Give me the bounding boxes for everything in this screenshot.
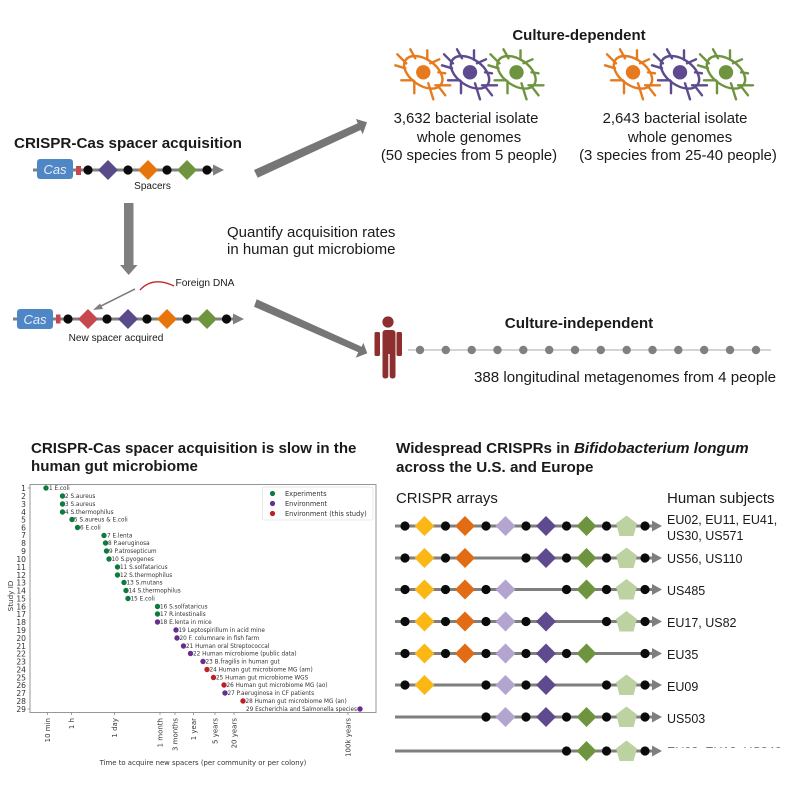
point labels: 7 E.lenta — [107, 534, 132, 540]
arrow: to culture-independent — [254, 299, 367, 358]
x axis labels: 1 day — [111, 718, 119, 738]
label: Spacers: Spacers — [134, 181, 171, 192]
array row 6 — [395, 674, 662, 695]
y axis labels: 8 — [21, 539, 26, 548]
array row 3 — [395, 579, 662, 600]
y axis labels: 4 — [21, 508, 26, 517]
foreign DNA strand and label: Foreign DNA — [176, 278, 235, 289]
point labels: 15 E.coli — [130, 596, 155, 602]
heading: spacer acquisition is slow: CRISPR-Cas spacer acquisition is slow in the — [31, 440, 356, 457]
x axis labels: 20 years — [230, 718, 238, 748]
panel: culture-independent — [374, 315, 776, 386]
x axis labels: 100k years — [344, 718, 352, 757]
y axis labels: 26 — [16, 681, 26, 690]
arrow: to culture-dependent — [254, 119, 367, 178]
point labels: 5 S.aureus & E.coli — [74, 518, 128, 524]
y axis labels: 9 — [21, 547, 26, 556]
icons: bacteria group 2 — [605, 49, 753, 99]
y axis labels: 7 — [21, 531, 26, 540]
point labels: 24 Human gut microbiome MG (am) — [210, 668, 313, 674]
point labels: 23 B.fragilis in human gut — [206, 660, 280, 666]
y axis labels: 13 — [16, 578, 26, 588]
green points: experiments — [43, 485, 160, 617]
heading: Widespread CRISPRs: Widespread CRISPRs in — [396, 440, 574, 457]
label: New spacer acquired: New spacer acquired — [69, 333, 163, 344]
CRISPR array after acquisition — [13, 309, 244, 329]
point labels: 11 S.solfataricus — [120, 565, 168, 571]
y axis labels: 3 — [21, 500, 26, 509]
point labels: 4 S.thermophilus — [65, 510, 114, 516]
point labels: 17 R.intestinalis — [160, 612, 206, 618]
legend: Environment (this study) — [285, 510, 367, 518]
point labels: 26 Human gut microbiome MG (ao) — [226, 683, 328, 689]
x axis labels: 1 year — [190, 718, 198, 740]
point labels: 29 Escherichia and Salmonella species — [246, 707, 357, 713]
y axis labels: 14 — [16, 586, 26, 596]
heading: spacer acquisition is slow: human gut microbiome — [31, 458, 198, 475]
point labels: 22 Human microbiome (public data) — [193, 652, 297, 658]
point labels: 25 Human gut microbiome WGS — [216, 676, 309, 682]
y axis labels: 12 — [16, 571, 26, 580]
point labels: 3 S.aureus — [65, 502, 95, 508]
y axis labels: 16 — [16, 602, 26, 612]
text: 3,632 isolates: 3,632 bacterial isolate — [394, 111, 538, 127]
heading: Widespread CRISPRs: across the U.S. and Europe — [396, 459, 594, 476]
heading: Culture-independent: Culture-independent — [505, 315, 653, 332]
arrow: down to new spacer — [120, 203, 138, 275]
array row 1 — [395, 516, 662, 536]
y axis labels: 19 — [16, 626, 26, 635]
point labels: 21 Human oral Streptococcal — [186, 644, 270, 650]
point labels: 16 S.solfataricus — [160, 604, 208, 610]
heading: CRISPR-Cas spacer acquisition: CRISPR-Cas spacer acquisition — [14, 135, 242, 152]
text: 388 longitudinal metagenomes: 388 longitudinal metagenomes from 4 people — [474, 369, 776, 386]
x axis labels: 10 min — [44, 718, 52, 742]
CRISPR array before acquisition — [33, 159, 224, 180]
icon: person — [374, 316, 402, 378]
array row 8 — [395, 740, 662, 761]
x axis title: Time to acquire new spacers (per community or per colony) — [99, 759, 307, 767]
x axis labels: 1 h — [68, 718, 76, 729]
panel: spacer acquisition schematic — [13, 135, 244, 344]
legend: Experiments — [285, 490, 327, 498]
CRISPR array before acquisition: Cas — [43, 162, 67, 177]
timeline of samples — [408, 346, 771, 354]
point labels: 2 S.aureus — [65, 494, 95, 500]
point labels: 10 S.pyogenes — [112, 557, 154, 563]
point labels: 28 Human gut microbiome MG (an) — [246, 699, 347, 705]
foreign DNA strand and label — [140, 278, 235, 290]
subjects row 5: EU35 — [667, 648, 698, 662]
legend — [262, 487, 373, 520]
subjects row 1: EU02, EU11, EU41, — [667, 513, 777, 527]
purple points: environment — [155, 619, 363, 712]
text: quantify acquisition rates: Quantify acquisition rates — [227, 224, 395, 241]
subjects row 7: US503 — [667, 712, 705, 726]
text: quantify acquisition rates: in human gut microbiome — [227, 241, 395, 258]
text: 2,643 isolates: 2,643 bacterial isolate — [603, 111, 747, 127]
text: 3,632 isolates: (50 species from 5 people) — [381, 148, 557, 164]
y axis labels: 29 — [16, 705, 26, 714]
panel: CRISPR arrays across subjects — [395, 490, 790, 762]
x axis labels — [44, 718, 352, 757]
point labels: 9 P.atrosepticum — [109, 549, 157, 555]
y axis labels: 20 — [16, 634, 26, 643]
point labels: 6 E.coli — [80, 526, 101, 532]
panel: culture-dependent — [381, 27, 777, 164]
red points: this study — [204, 667, 246, 704]
text: 3,632 isolates: whole genomes — [416, 130, 521, 146]
point labels: 1 E.coli — [49, 486, 70, 492]
y axis labels: 2 — [21, 492, 26, 501]
y axis labels: 27 — [16, 689, 26, 698]
point labels: 19 Leptospirillum in acid mine — [178, 628, 265, 634]
y axis labels: 11 — [16, 563, 26, 572]
array row 5 — [395, 644, 662, 664]
CRISPR array after acquisition: Cas — [23, 312, 47, 327]
subjects row 8 (cropped): EU03, EU13, US840 — [667, 745, 782, 759]
y axis labels: 22 — [16, 650, 26, 658]
point labels: 8 P.aeruginosa — [108, 541, 150, 547]
heading: Culture-dependent: Culture-dependent — [512, 27, 646, 44]
y axis labels — [16, 484, 26, 714]
arrow: foreign DNA into array — [93, 289, 135, 310]
heading: Widespread CRISPRs: Bifidobacterium longum — [574, 440, 749, 457]
y axis labels: 15 — [16, 594, 26, 604]
y axis labels: 10 — [16, 555, 26, 564]
y axis labels: 21 — [16, 642, 26, 651]
column header: CRISPR arrays: CRISPR arrays — [396, 491, 498, 507]
x axis labels: 5 years — [212, 718, 220, 744]
column header: Human subjects: Human subjects — [667, 490, 775, 507]
subjects row 3: US485 — [667, 584, 705, 598]
subjects row 2: US56, US110 — [667, 552, 743, 566]
point labels: 12 S.thermophilus — [120, 573, 172, 579]
point labels: 27 P.aeruginosa in CF patients — [228, 691, 314, 697]
subjects row 1: US30, US571 — [667, 529, 743, 543]
text: 2,643 isolates: whole genomes — [627, 130, 732, 146]
text: 2,643 isolates: (3 species from 25-40 people) — [579, 148, 777, 164]
y axis labels: 28 — [16, 697, 26, 706]
point labels: 20 F. columnare in fish farm — [180, 636, 260, 642]
legend: Environment — [285, 500, 328, 508]
point labels: 13 S.mutans — [126, 580, 163, 586]
x axis labels: 1 month — [156, 718, 164, 747]
subjects row 4: EU17, US82 — [667, 616, 737, 630]
y axis title: Study ID — [6, 580, 15, 611]
x axis labels: 3 months — [172, 718, 180, 751]
point labels: 14 S.thermophilus — [128, 588, 181, 594]
point labels: 18 E.lenta in mice — [160, 620, 212, 626]
y axis labels: 25 — [16, 674, 26, 682]
subjects row 6: EU09 — [667, 680, 698, 694]
point labels — [49, 486, 357, 713]
y axis labels: 5 — [21, 516, 26, 524]
y axis labels: 6 — [21, 524, 26, 532]
array row 7 — [395, 706, 662, 727]
y axis labels: 23 — [16, 658, 26, 666]
y axis labels: 18 — [16, 618, 26, 627]
y axis labels: 17 — [16, 610, 26, 619]
array row 4 — [395, 611, 662, 632]
array row 2 — [395, 548, 662, 568]
y axis labels: 1 — [21, 484, 26, 493]
chart: time to acquire new spacers — [6, 484, 376, 767]
icons: bacteria group 1 — [395, 49, 544, 99]
y axis labels: 24 — [16, 666, 26, 674]
